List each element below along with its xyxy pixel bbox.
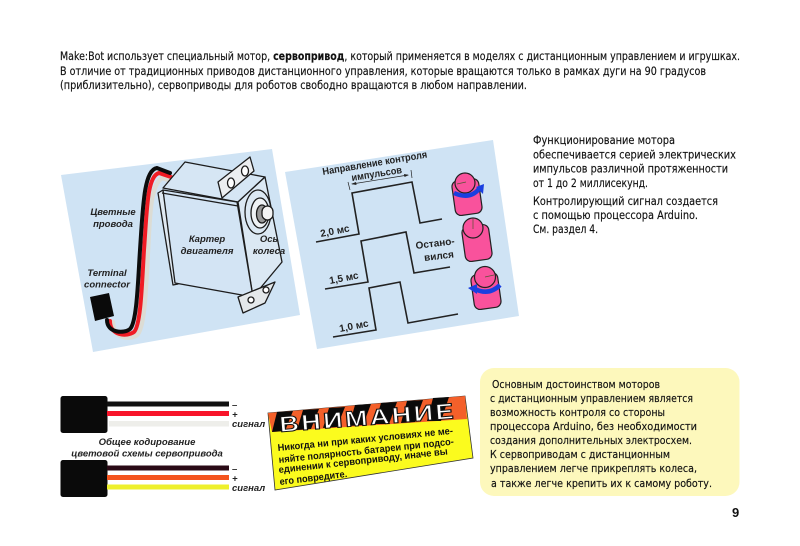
advantages text bbox=[490, 378, 712, 490]
advantages text: Основным достоинством моторов bbox=[492, 378, 660, 391]
advantages text: процессора Arduino, без необходимости bbox=[490, 420, 697, 433]
connector 2 bbox=[60, 460, 229, 497]
text: how the motor works: с помощью процессора Arduino. bbox=[533, 209, 698, 222]
warning heading: ВНИМАНИЕ bbox=[278, 398, 457, 437]
intro text: В отличие от традиционных приводов дистанционного управления, которые вращаются только в рамках дуги на 90 градусов bbox=[60, 65, 706, 78]
panel: advantages bbox=[480, 368, 740, 496]
icon: servo rotating right bbox=[451, 173, 484, 216]
warning text: единении к сервоприводу, иначе вы bbox=[278, 446, 448, 476]
heading: pulse direction: импульсов bbox=[351, 165, 403, 184]
connector 1 bbox=[60, 396, 229, 433]
arrow: pulse width bbox=[348, 170, 412, 190]
panel background bbox=[61, 149, 300, 352]
callout: warning bbox=[268, 396, 473, 490]
wire labels 2: сигнал bbox=[232, 483, 265, 494]
label: wheel axle: колеса bbox=[253, 246, 285, 257]
label: wheel axle: Ось bbox=[260, 234, 278, 245]
advantages background bbox=[480, 368, 740, 496]
advantages text: управлением легче прикреплять колеса, bbox=[490, 462, 697, 475]
advantages text: а также легче крепить их к самому роботу. bbox=[491, 477, 712, 490]
icon: motor housing bbox=[158, 157, 282, 313]
icon: servo rotating left bbox=[468, 266, 502, 310]
panel: control pulses diagram bbox=[285, 140, 519, 349]
text: how the motor works: импульсов различной протяженности bbox=[533, 162, 728, 176]
wire labels 1: – bbox=[232, 400, 237, 411]
label: motor housing: двигателя bbox=[181, 246, 234, 257]
intro text: (приблизительно), сервоприводы для роботов свободно вращаются в любом направлении. bbox=[60, 79, 527, 92]
panel: wire colour coding bbox=[60, 396, 265, 497]
label: terminal connector: connector bbox=[84, 280, 131, 290]
label: stopped: вился bbox=[424, 249, 455, 264]
label: motor housing: Картер bbox=[189, 234, 225, 245]
text: how the motor works: Функционирование мотора bbox=[533, 134, 675, 147]
text: how the motor works: обеспечивается серией электрических bbox=[533, 148, 736, 162]
warning text bbox=[277, 426, 454, 488]
panel background bbox=[285, 140, 519, 349]
advantages text: К сервоприводам с дистанционным bbox=[490, 448, 670, 461]
page number: 9 bbox=[732, 505, 739, 520]
text: how the motor works: от 1 до 2 миллисекунд. bbox=[533, 177, 648, 190]
intro text: Make:Bot использует специальный мотор, сервопривод, который применяется в моделях с дистанционным управлением и игрушках. bbox=[60, 50, 740, 63]
label: stopped: Остано- bbox=[415, 236, 455, 252]
warning text: няйте полярность батареи при подсо- bbox=[278, 437, 454, 466]
warning text: его повредите. bbox=[279, 469, 348, 488]
label: 1.5 ms: 1,5 мс bbox=[328, 270, 360, 287]
icon: servo stopped bbox=[461, 218, 493, 262]
advantages text: с дистанционным управлением является bbox=[490, 392, 693, 405]
intro text bbox=[60, 50, 740, 92]
warning stripe band bbox=[268, 396, 467, 432]
label: terminal connector: Terminal bbox=[87, 268, 127, 279]
warning background bbox=[268, 396, 473, 490]
text: how the motor works bbox=[533, 134, 736, 236]
warning text: Никогда ни при каких условиях не ме- bbox=[277, 426, 453, 454]
label: 1.0 ms: 1,0 мс bbox=[338, 318, 370, 335]
caption: Общее кодирование bbox=[99, 437, 195, 448]
text: how the motor works: Контролирующий сигнал создается bbox=[533, 195, 718, 208]
caption: цветовой схемы сервопривода bbox=[71, 448, 223, 460]
wire labels 2: + bbox=[232, 474, 238, 484]
label: colored wires: Цветные bbox=[90, 207, 136, 218]
label: 2.0 ms: 2,0 мс bbox=[319, 223, 351, 240]
advantages text: создания дополнительных электросхем. bbox=[490, 434, 692, 447]
pulse chart bbox=[316, 182, 458, 337]
wire labels 1: сигнал bbox=[232, 419, 265, 430]
wire labels 2: – bbox=[232, 464, 237, 475]
wire labels 1: + bbox=[232, 410, 238, 420]
icon: terminal connector bbox=[90, 293, 114, 321]
advantages text: возможность контроля со стороны bbox=[490, 406, 665, 419]
wires bbox=[107, 168, 172, 338]
panel: servo motor diagram bbox=[61, 149, 300, 352]
heading: pulse direction: Направление контроля bbox=[322, 150, 428, 178]
text: how the motor works: См. раздел 4. bbox=[533, 223, 598, 236]
label: colored wires: провода bbox=[93, 219, 133, 230]
